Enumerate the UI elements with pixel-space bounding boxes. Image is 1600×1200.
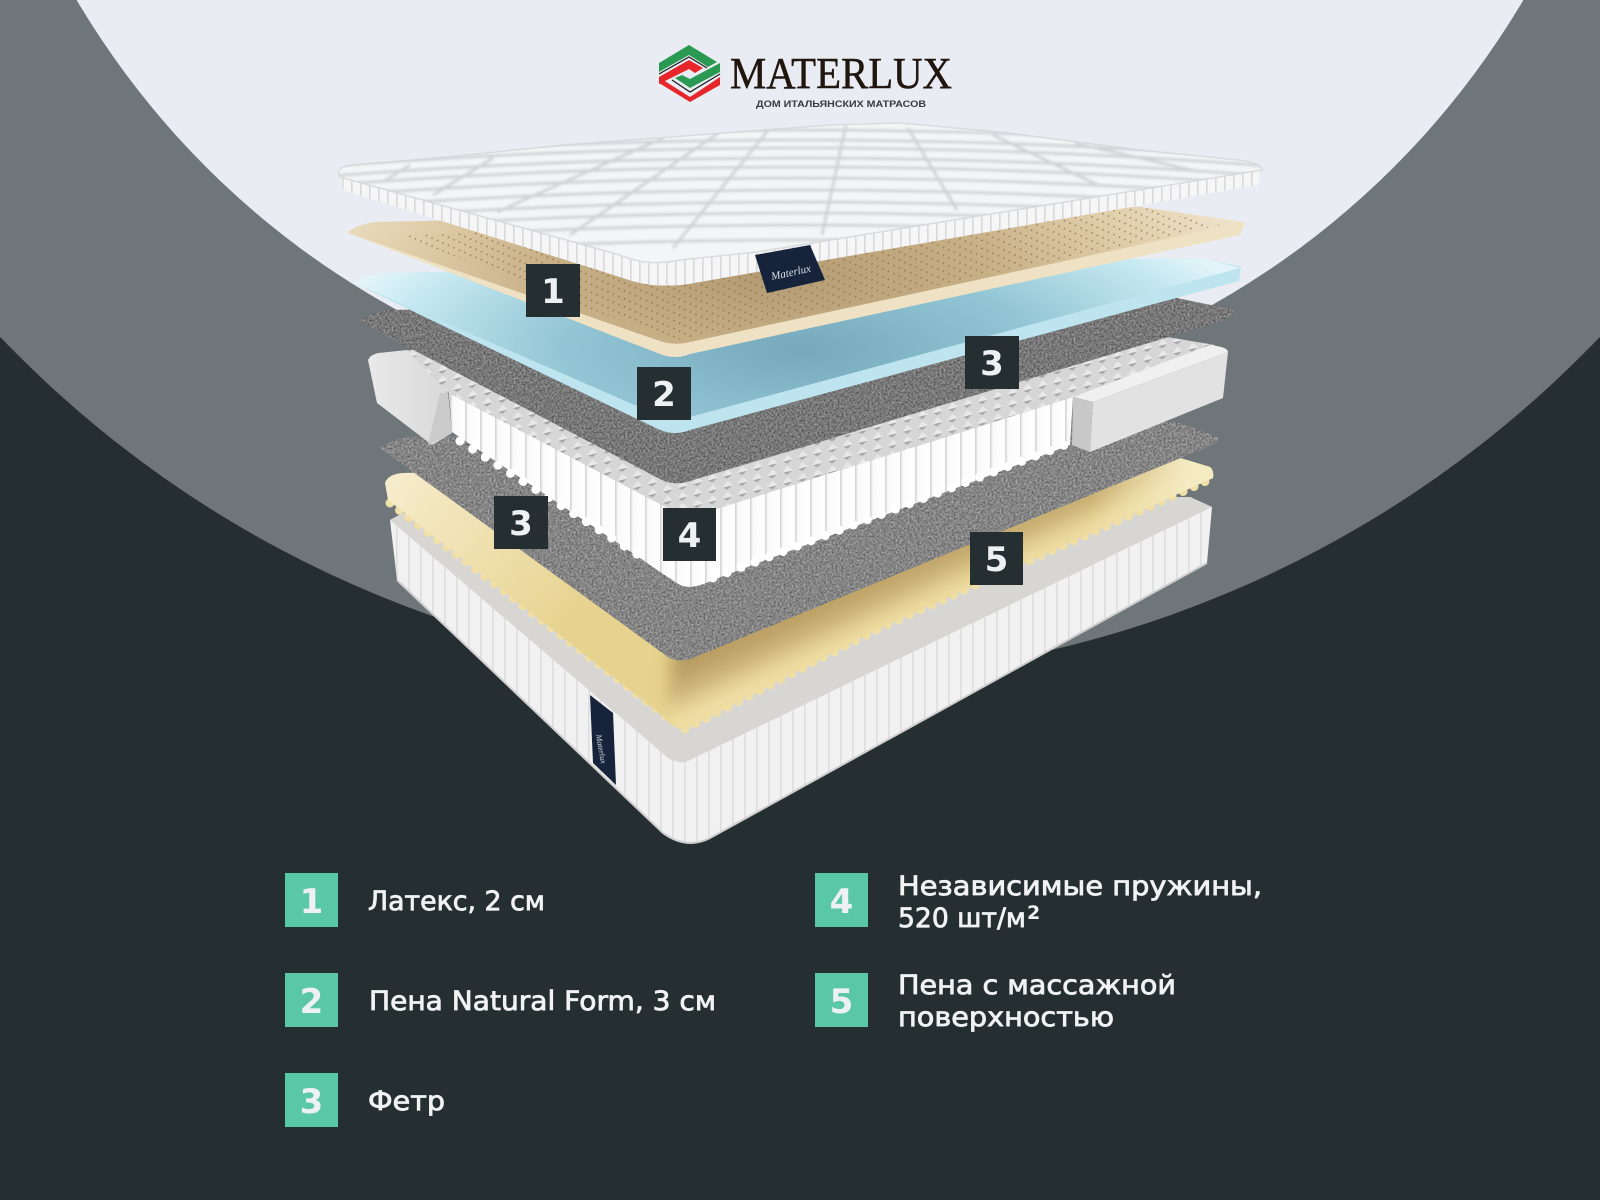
- spring side columns: [449, 393, 1073, 587]
- background: light circle: [0, 0, 1600, 413]
- callout 1: 1: [541, 272, 565, 312]
- legend item 1: 1: [300, 882, 323, 922]
- legend item 2: [285, 973, 716, 1027]
- logo: [659, 45, 952, 110]
- legend item 5: поверхностью: [898, 1002, 1114, 1033]
- mattress exploded illustration: [330, 123, 1270, 843]
- spring top surface: [392, 300, 1215, 517]
- legend item 2: Пена Natural Form, 3 см: [369, 986, 716, 1017]
- callout 3 lower: 3: [509, 504, 533, 544]
- layer: latex: [348, 207, 1245, 357]
- legend item 4: 520 шт/м: [898, 903, 1026, 934]
- layer: blue foam: [354, 258, 1241, 433]
- legend item 3: Фетр: [368, 1086, 445, 1117]
- legend item 5: Пена с массажной: [898, 970, 1176, 1001]
- tag on base mattress: Materlux: [594, 733, 608, 765]
- legend item 3: 3: [300, 1082, 323, 1122]
- legend item 1: Латекс, 2 см: [368, 886, 545, 917]
- callout 2: [637, 367, 691, 420]
- callout 4: [663, 508, 716, 561]
- legend item 2: 2: [300, 982, 323, 1022]
- callout 2: 2: [652, 375, 676, 415]
- callout 3 upper: 3: [980, 344, 1004, 384]
- topper side border: [340, 170, 1261, 286]
- callout 5: [970, 532, 1023, 585]
- legend item 3: [285, 1073, 445, 1127]
- layer: quilted topper: [330, 123, 1270, 286]
- layer: base mattress: [390, 497, 1212, 843]
- legend item 4: 4: [830, 882, 853, 922]
- callout 3 upper: [965, 336, 1019, 389]
- foam insert left: [368, 350, 452, 445]
- callout 1: [526, 264, 580, 317]
- foam insert right: [1072, 345, 1228, 452]
- spring bottom scallop: [460, 441, 1070, 578]
- legend: [285, 871, 1262, 1127]
- callout 5: 5: [985, 540, 1008, 580]
- legend item 4: Независимые пружины,: [898, 871, 1262, 902]
- logo tagline: ДОМ ИТАЛЬЯНСКИХ МАТРАСОВ: [756, 99, 926, 110]
- layer: massage foam: [385, 458, 1214, 734]
- layer: upper felt: [360, 298, 1235, 483]
- legend item 5: 5: [830, 982, 853, 1022]
- tag on base mattress: [590, 695, 616, 785]
- logo wordmark: MATERLUX: [730, 49, 952, 98]
- legend item 5: [815, 970, 1176, 1033]
- background: gray circle: [0, 0, 1600, 679]
- layer: lower felt: [380, 422, 1218, 661]
- icon: logo hexagon: [659, 45, 720, 102]
- callout 3 lower: [494, 496, 548, 549]
- tag on topper: [755, 245, 825, 293]
- layer: pocket springs: [368, 300, 1228, 587]
- legend item 4: 2: [1027, 902, 1040, 924]
- topper quilting seams: [330, 125, 1270, 258]
- legend item 1: [285, 873, 545, 927]
- tag on topper: Materlux: [769, 263, 812, 283]
- legend item 4: [815, 871, 1262, 934]
- callout 4: 4: [678, 516, 701, 556]
- topper quilted surface: [338, 123, 1262, 263]
